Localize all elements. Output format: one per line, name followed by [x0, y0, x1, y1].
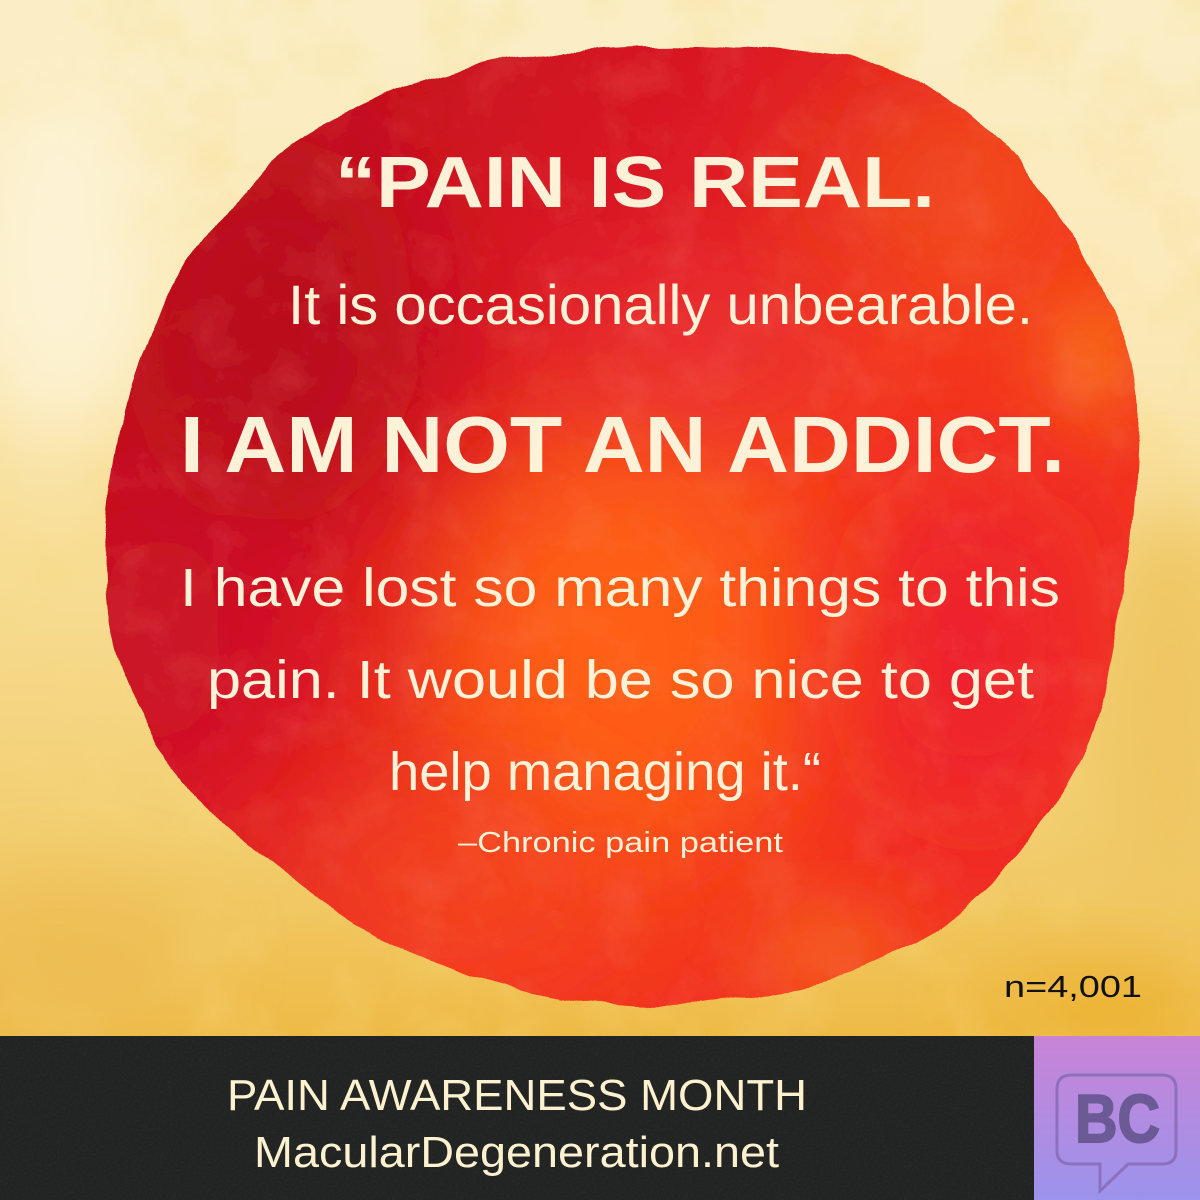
footer band: [0, 1036, 1034, 1200]
logo letters: BC: [1075, 1081, 1160, 1157]
footer title: PAIN AWARENESS MONTH: [227, 1071, 807, 1120]
footer website: MacularDegeneration.net: [254, 1128, 779, 1177]
line: lost so many things: I have lost so many things to this: [180, 558, 1060, 618]
attribution: –Chronic pain patient: [458, 827, 783, 859]
line: occasionally unbearable: It is occasionally unbearable.: [288, 273, 1033, 336]
heading line: not an addict: I AM NOT AN ADDICT.: [180, 400, 1065, 489]
line: would be so nice: pain. It would be so nice to get: [207, 650, 1034, 710]
logo panel: [1034, 1036, 1200, 1200]
sample size note: n=4,001: [1004, 969, 1142, 1004]
red watercolor circle: [90, 30, 1160, 1020]
line: help managing it: help managing it.“: [389, 742, 821, 802]
heading line: pain is real: “PAIN IS REAL.: [335, 143, 935, 223]
icon: speech bubble: [1057, 1075, 1176, 1191]
quote text: [180, 143, 1065, 859]
